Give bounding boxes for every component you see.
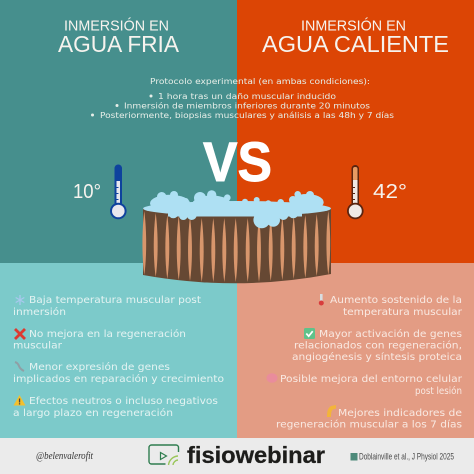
- text block: experimental protocol: [91, 76, 394, 120]
- icon: cold thermometer: [110, 164, 127, 219]
- panel: hot effects background: [237, 263, 474, 438]
- icon: small thermometer: [319, 294, 324, 306]
- text block: experimental protocol: 1 hora tras un daño muscular inducido: [158, 91, 336, 101]
- heading: cold water: [58, 18, 179, 57]
- text block: hot water effects: temperatura muscular: [343, 307, 462, 318]
- text block: hot water effects: Aumento sostenido de la: [330, 295, 462, 306]
- text block: experimental protocol: Posteriormente, biopsias musculares y análisis a las 48h y 7 días: [100, 110, 394, 120]
- foam: [143, 190, 331, 228]
- panel: hot header background: [237, 0, 474, 263]
- text block: cold water effects: Efectos neutros o incluso negativos: [29, 396, 218, 407]
- text block: hot water effects: angiogénesis y síntesis proteica: [292, 351, 462, 363]
- text block: experimental protocol: Protocolo experimental (en ambas condiciones):: [150, 76, 370, 86]
- text block: cold water effects: inmersión: [13, 306, 66, 318]
- text block: hot water effects: Mejores indicadores de: [338, 408, 462, 419]
- text block: cold water effects: implicados en reparación y crecimiento: [13, 373, 224, 385]
- icon: snowflake: [16, 295, 24, 305]
- panel: footer background: [0, 438, 474, 474]
- text block: hot water effects: relacionados con regeneración,: [294, 340, 462, 352]
- tub body: [143, 208, 331, 283]
- tub slats: [142, 211, 330, 282]
- heading: hot water: INMERSIÓN EN: [301, 18, 406, 34]
- label: 42 degrees: 42°: [373, 181, 407, 203]
- text block: cold water effects: [13, 295, 224, 419]
- icon: red cross: [15, 329, 25, 339]
- icon: warning triangle: [14, 395, 26, 406]
- text block: hot water effects: post lesión: [415, 385, 462, 397]
- label: 10 degrees: 10°: [73, 181, 101, 203]
- illustration: wooden tub with foam: [142, 190, 331, 283]
- text block: hot water effects: regeneración muscular a los 7 días: [276, 418, 462, 430]
- heading: hot water: AGUA CALIENTE: [262, 31, 449, 57]
- heading: cold water: INMERSIÓN EN: [64, 18, 169, 34]
- icon: hot thermometer: [347, 165, 364, 219]
- icon: green check: [304, 328, 315, 339]
- icon: DNA strand: [15, 362, 24, 371]
- panel: cold header background: [0, 0, 237, 263]
- heading: cold water: AGUA FRIA: [58, 31, 179, 57]
- footer: author handle: @belenvalerofit: [36, 450, 94, 462]
- text block: cold water effects: Menor expresión de genes: [29, 361, 170, 373]
- heading: VS: VS: [203, 130, 272, 193]
- text block: cold water effects: Baja temperatura muscular post: [29, 295, 201, 306]
- text block: experimental protocol: Inmersión de miembros inferiores durante 20 minutos: [124, 100, 370, 110]
- icon: brain: [266, 373, 278, 383]
- footer: fisiowebinar wordmark: fisiowebinar: [187, 442, 325, 468]
- text block: hot water effects: [266, 294, 462, 430]
- text block: cold water effects: No mejora en la regeneración: [29, 328, 186, 340]
- panel: cold effects background: [0, 263, 237, 438]
- heading: hot water: [262, 18, 449, 57]
- icon: books: [350, 453, 358, 460]
- text block: cold water effects: a largo plazo en regeneración: [13, 407, 173, 419]
- text block: hot water effects: Mayor activación de genes: [319, 328, 462, 340]
- text block: hot water effects: Posible mejora del entorno celular: [280, 374, 462, 385]
- icon: flexed arm: [327, 405, 336, 417]
- icon: fisiowebinar logo: [149, 445, 178, 465]
- text block: cold water effects: muscular: [13, 340, 62, 352]
